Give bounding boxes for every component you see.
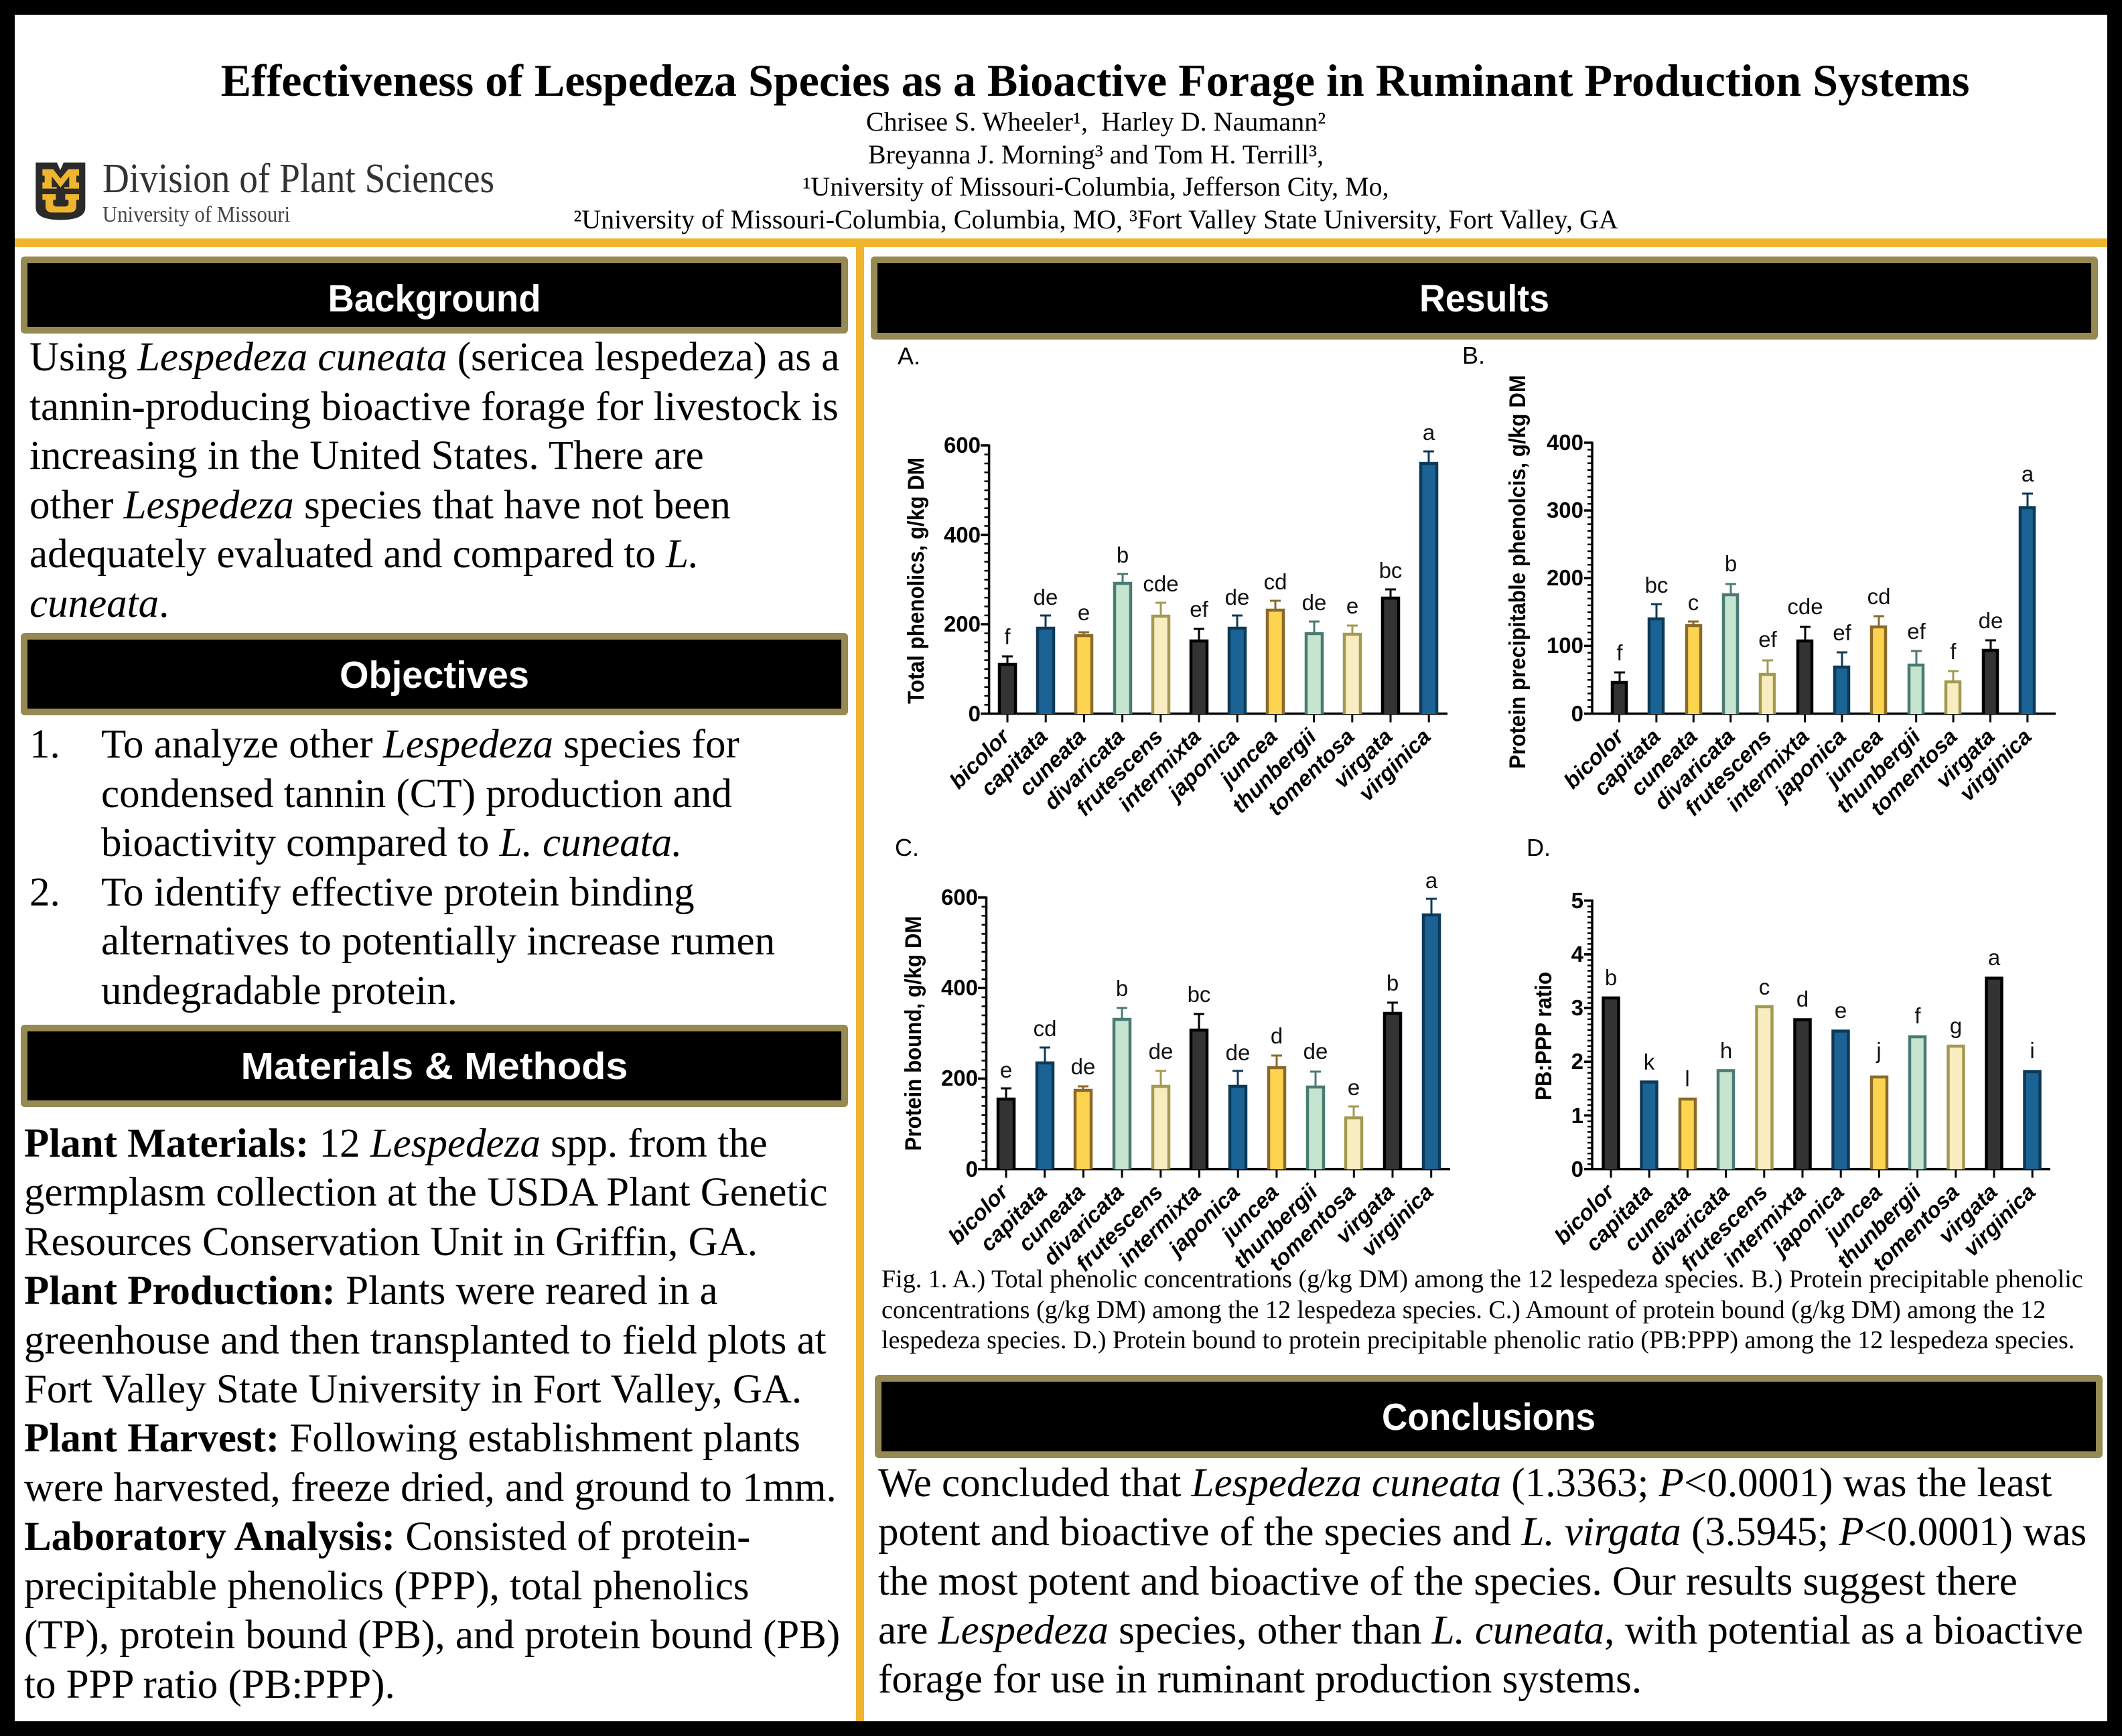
gold divider: horizontal	[15, 238, 2107, 247]
heading: results	[871, 257, 2098, 340]
authors and affiliations: Breyanna J. Morning³ and Tom H. Terrill³,	[868, 139, 1324, 169]
text block: background	[29, 335, 839, 626]
species labels: japonica	[1766, 1179, 1849, 1262]
figure caption	[881, 1265, 2083, 1354]
figure caption: Fig. 1. A.) Total phenolic concentrations (g/kg DM) among the 12 lespedeza species. B.) Protein precipitable phenolic	[881, 1265, 2083, 1293]
significance letters: k	[1644, 1050, 1655, 1074]
species labels: juncea	[1819, 724, 1888, 793]
species labels	[1559, 723, 2036, 820]
y axis tick labels: 5	[1571, 888, 1583, 913]
text block: conclusions	[878, 1461, 2086, 1702]
significance letters	[1605, 945, 2035, 1091]
species labels: thunbergii	[1228, 1179, 1323, 1273]
heading: conclusions: Conclusions	[1382, 1396, 1596, 1439]
text block: methods	[24, 1121, 840, 1707]
species labels: juncea	[1213, 724, 1282, 793]
y axis tick labels: 200	[944, 611, 981, 636]
y axis tick labels: 600	[941, 885, 978, 910]
species labels: bicolor	[1549, 1178, 1620, 1249]
significance letters: e	[1346, 593, 1358, 618]
species labels: thunbergii	[1831, 723, 1926, 818]
species labels: japonica	[1161, 724, 1244, 806]
species labels: intermixta	[1113, 724, 1206, 816]
significance letters: cde	[1787, 594, 1823, 619]
text block: conclusions: potent and bioactive of the species and L. virgata (3.5945; P<0.0001) was	[878, 1510, 2086, 1554]
species labels	[943, 1178, 1438, 1276]
chart D: PB:PPP ratio: D.	[1527, 834, 1551, 861]
title: Effectiveness of Lespedeza Species as a Bioactive Forage in Ruminant Production Systems	[221, 55, 1969, 106]
species labels: virgata	[1330, 1179, 1399, 1248]
authors and affiliations: ²University of Missouri-Columbia, Columbia, MO, ³Fort Valley State University, Fort Valley, GA	[573, 204, 1618, 234]
panel: conclusions	[875, 1375, 2103, 1702]
species labels: capitata	[1589, 724, 1665, 800]
icon: Mizzou MU shield	[36, 163, 85, 220]
significance letters: c	[1759, 974, 1770, 999]
authors and affiliations: ¹University of Missouri-Columbia, Jefferson City, Mo,	[802, 171, 1389, 202]
significance letters: de	[1034, 585, 1058, 609]
species labels: intermixta	[1718, 1179, 1811, 1271]
species labels: virginica	[1354, 724, 1435, 806]
chart A: total phenolics: A.	[898, 342, 920, 370]
significance letters: de	[1979, 608, 2003, 633]
gold divider: vertical	[856, 247, 864, 1721]
significance letters: e	[1348, 1075, 1360, 1100]
species labels: tomentosa	[1867, 1179, 1964, 1276]
species labels: thunbergii	[1832, 1179, 1926, 1273]
significance letters	[1616, 461, 2034, 665]
y axis tick labels: 3	[1571, 995, 1583, 1020]
axes	[1584, 442, 2056, 718]
heading: conclusions	[875, 1375, 2103, 1458]
species labels: tomentosa	[1865, 724, 1962, 820]
text block: conclusions: the most potent and bioactive of the species. Our results suggest there	[878, 1559, 2018, 1604]
bars with error bars	[999, 451, 1437, 714]
chart A: total phenolics	[898, 342, 1447, 820]
text block: objectives list: bioactivity compared to L. cuneata.	[101, 820, 682, 865]
species labels: virgata	[1933, 1179, 2002, 1248]
authors and affiliations: Chrisee S. Wheeler¹, Harley D. Naumann²	[866, 106, 1326, 137]
species labels: frutescens	[1071, 724, 1168, 820]
significance letters: g	[1950, 1013, 1962, 1038]
bars with error bars	[1612, 494, 2034, 714]
logo: Division of Plant Sciences, University of Missouri	[36, 156, 494, 227]
significance letters: cde	[1143, 571, 1179, 596]
species labels: intermixta	[1721, 724, 1814, 816]
y axis tick labels: 2	[1571, 1049, 1583, 1074]
heading: materials and methods	[21, 1025, 848, 1107]
species labels: juncea	[1214, 1179, 1283, 1248]
text block: background: adequately evaluated and compared to L.	[29, 532, 699, 577]
species labels: japonica	[1161, 1179, 1245, 1262]
significance letters: ef	[1907, 619, 1926, 644]
species labels: capitata	[1581, 1179, 1657, 1256]
significance letters: de	[1226, 1040, 1250, 1065]
y axis title: Protein precipitable phenolcis, g/kg DM	[1505, 375, 1531, 769]
significance letters: de	[1303, 1039, 1328, 1064]
text block: conclusions: forage for use in ruminant production systems.	[878, 1657, 1642, 1702]
text block: methods: (TP), protein bound (PB), and protein bound (PB)	[24, 1613, 840, 1658]
axes	[981, 445, 1447, 718]
figure caption: concentrations (g/kg DM) among the 12 lespedeza species. C.) Amount of protein bound (g/kg DM) among the 12	[881, 1296, 2046, 1324]
heading: objectives: Objectives	[340, 654, 529, 697]
species labels: capitata	[975, 1179, 1052, 1256]
significance letters: cd	[1264, 569, 1287, 594]
text block: conclusions: We concluded that Lespedeza cuneata (1.3363; P<0.0001) was the least	[878, 1461, 2052, 1506]
heading: background: Background	[328, 277, 541, 320]
authors and affiliations	[573, 106, 1618, 234]
text block: methods: to PPP ratio (PB:PPP).	[24, 1662, 395, 1707]
species labels: bicolor	[944, 723, 1015, 794]
significance letters: a	[1425, 868, 1438, 893]
bars with error bars	[998, 899, 1439, 1169]
significance letters: b	[1116, 976, 1128, 1001]
y axis tick labels	[941, 885, 978, 1181]
species labels: divaricata	[1039, 724, 1129, 814]
chart B: protein precipitable phenolics: B.	[1462, 342, 1485, 369]
text block: background: other Lespedeza species that have not been	[29, 483, 731, 528]
y axis tick labels: 400	[1547, 430, 1583, 455]
species labels: thunbergii	[1227, 723, 1322, 818]
y axis tick labels: 1	[1571, 1103, 1583, 1128]
panel: background	[21, 257, 848, 626]
text block: background: tannin-producing bioactive forage for livestock is	[29, 384, 839, 429]
significance letters: b	[1725, 551, 1737, 576]
y axis tick labels: 4	[1571, 942, 1584, 966]
significance letters: f	[1004, 624, 1011, 649]
significance letters: c	[1688, 590, 1699, 615]
y axis tick labels: 200	[1547, 565, 1583, 590]
species labels: intermixta	[1113, 1179, 1206, 1271]
species labels: frutescens	[1071, 1179, 1168, 1276]
y axis title: Total phenolics, g/kg DM	[904, 457, 929, 704]
text block: objectives list: 1.	[29, 722, 60, 767]
chart B: protein precipitable phenolics	[1462, 342, 2056, 820]
y axis tick labels: 0	[1571, 701, 1583, 726]
chart C: protein bound	[895, 834, 1450, 1276]
significance letters: de	[1302, 590, 1326, 615]
y axis tick labels: 300	[1547, 498, 1583, 522]
species labels: cuneata	[1626, 724, 1702, 800]
text block: objectives list: 2.	[29, 870, 60, 915]
species labels: bicolor	[943, 1178, 1013, 1249]
significance letters: h	[1720, 1038, 1732, 1063]
axes	[978, 896, 1450, 1173]
text block: objectives list: condensed tannin (CT) production and	[101, 772, 732, 816]
significance letters: d	[1271, 1023, 1283, 1048]
significance letters: e	[1000, 1058, 1012, 1082]
species labels: tomentosa	[1264, 1179, 1360, 1276]
text block: methods: Plant Production: Plants were reared in a	[24, 1269, 718, 1313]
significance letters: l	[1685, 1066, 1690, 1091]
significance letters: bc	[1379, 558, 1402, 583]
axes	[1584, 899, 2050, 1173]
y axis title: Protein bound, g/kg DM	[901, 916, 926, 1151]
heading: materials and methods: Materials & Methods	[241, 1045, 628, 1088]
text block: objectives list: To identify effective protein binding	[101, 870, 695, 915]
heading: results: Results	[1419, 277, 1549, 320]
y axis tick labels: 400	[941, 975, 978, 1000]
significance letters: e	[1835, 998, 1847, 1023]
significance letters: cd	[1034, 1016, 1056, 1041]
species labels: virginica	[1356, 1179, 1438, 1261]
y axis tick labels: 100	[1547, 633, 1583, 658]
figure caption: lespedeza species. D.) Protein bound to protein precipitable phenolic ratio (PB:PPP) among the 12 lespedeza species.	[881, 1326, 2074, 1354]
significance letters: ef	[1758, 627, 1778, 652]
text block: background: cuneata.	[29, 581, 169, 626]
panel: results	[871, 257, 2098, 1354]
text block: methods: precipitable phenolics (PPP), total phenolics	[24, 1564, 750, 1609]
heading: objectives	[21, 633, 848, 715]
species labels: juncea	[1818, 1179, 1887, 1248]
y axis tick labels: 400	[944, 522, 981, 547]
y axis tick labels: 0	[966, 1157, 978, 1181]
y axis tick labels: 200	[941, 1066, 978, 1090]
text block: methods: Plant Materials: 12 Lespedeza spp. from the	[24, 1121, 768, 1166]
species labels: japonica	[1768, 724, 1851, 806]
significance letters: j	[1876, 1038, 1882, 1063]
species labels: virginica	[1959, 1179, 2040, 1261]
text block: conclusions: are Lespedeza species, other than L. cuneata, with potential as a bioactive	[878, 1608, 2083, 1653]
text block: objectives list	[29, 722, 775, 1013]
species labels: cuneata	[1014, 724, 1090, 800]
species labels: cuneata	[1013, 1179, 1090, 1256]
text block: background: Using Lespedeza cuneata (sericea lespedeza) as a	[29, 335, 839, 380]
significance letters: a	[1423, 420, 1435, 445]
logo: Division of Plant Sciences, University of Missouri: University of Missouri	[102, 202, 290, 227]
logo: Division of Plant Sciences, University of Missouri: Division of Plant Sciences	[102, 156, 494, 202]
species labels: divaricata	[1644, 1179, 1734, 1270]
text block: background: increasing in the United States. There are	[29, 433, 704, 478]
significance letters: de	[1225, 585, 1249, 609]
y axis title: PB:PPP ratio	[1531, 972, 1557, 1100]
significance letters: ef	[1833, 620, 1852, 645]
species labels: virgata	[1930, 724, 1999, 792]
heading: background	[21, 257, 848, 334]
species labels: bicolor	[1559, 723, 1629, 794]
text block: objectives list: undegradable protein.	[101, 968, 457, 1013]
text block: methods: germplasm collection at the USDA Plant Genetic	[24, 1170, 827, 1215]
significance letters: i	[2030, 1038, 2035, 1063]
panel: objectives	[21, 633, 848, 1013]
text block: methods: were harvested, freeze dried, and ground to 1mm.	[24, 1465, 837, 1510]
y axis tick labels: 0	[969, 701, 981, 726]
y axis tick labels: 600	[944, 433, 981, 457]
text block: objectives list: alternatives to potentially increase rumen	[101, 919, 775, 964]
significance letters: f	[1616, 640, 1623, 665]
species labels: virginica	[1955, 724, 2036, 806]
significance letters: a	[1988, 945, 2001, 970]
significance letters	[1004, 420, 1435, 649]
significance letters: d	[1796, 987, 1809, 1011]
significance letters: b	[1605, 965, 1617, 990]
species labels	[944, 723, 1435, 820]
species labels: divaricata	[1649, 724, 1740, 814]
significance letters: bc	[1645, 573, 1668, 597]
species labels	[1549, 1178, 2040, 1276]
significance letters: b	[1387, 970, 1399, 995]
y axis tick labels	[1571, 888, 1584, 1181]
panel: materials and methods	[21, 1025, 848, 1707]
y axis tick labels	[1547, 430, 1583, 726]
species labels: divaricata	[1038, 1179, 1129, 1270]
text block: methods: greenhouse and then transplanted to field plots at	[24, 1318, 827, 1363]
significance letters: bc	[1188, 982, 1210, 1007]
species labels: frutescens	[1680, 724, 1776, 820]
text block: methods: Resources Conservation Unit in Griffin, GA.	[24, 1220, 758, 1264]
significance letters	[1000, 868, 1438, 1100]
text block: methods: Laboratory Analysis: Consisted of protein-	[24, 1514, 750, 1559]
significance letters: de	[1149, 1039, 1173, 1064]
species labels: cuneata	[1619, 1179, 1695, 1256]
species labels: tomentosa	[1263, 724, 1359, 820]
significance letters: e	[1078, 600, 1090, 625]
chart D: PB:PPP ratio	[1527, 834, 2050, 1276]
text block: methods: Plant Harvest: Following establishment plants	[24, 1416, 800, 1461]
text block: objectives list: To analyze other Lespedeza species for	[101, 722, 739, 767]
significance letters: f	[1914, 1003, 1921, 1028]
chart C: protein bound: C.	[895, 834, 919, 861]
y axis tick labels	[944, 433, 981, 726]
species labels: virgata	[1328, 724, 1397, 792]
significance letters: b	[1117, 542, 1129, 567]
significance letters: ef	[1190, 597, 1209, 622]
significance letters: f	[1950, 639, 1957, 664]
species labels: frutescens	[1676, 1179, 1772, 1276]
text block: methods: Fort Valley State University in Fort Valley, GA.	[24, 1367, 802, 1412]
species labels: capitata	[976, 724, 1052, 800]
significance letters: a	[2022, 461, 2034, 486]
significance letters: de	[1071, 1054, 1095, 1079]
significance letters: cd	[1867, 584, 1890, 609]
bars	[1604, 978, 2040, 1169]
y axis tick labels: 0	[1571, 1157, 1583, 1181]
